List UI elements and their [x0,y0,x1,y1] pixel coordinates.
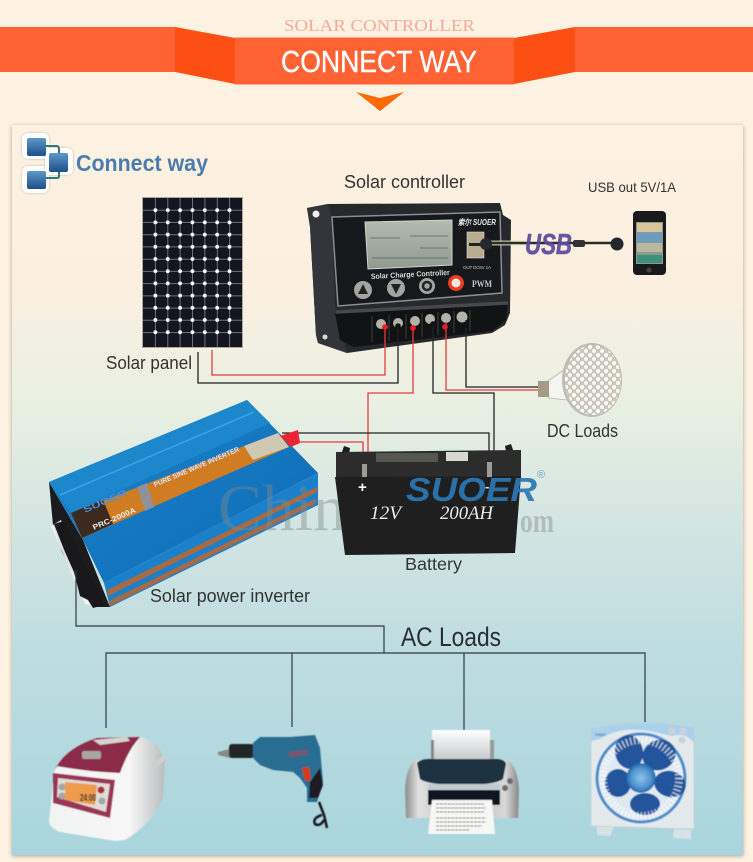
label: battery: Battery [405,554,462,574]
control buttons [354,275,464,299]
label: solar panel: Solar panel [106,353,192,373]
suoer logo: SUOER [406,471,537,508]
section header ribbon [0,27,753,84]
watermark [218,472,554,545]
inverter brand: SUOER [82,487,129,515]
label: ac loads: AC Loads [401,622,501,652]
wires: controller connections [198,320,538,468]
icon: box fan [591,723,694,839]
battery voltage: 12V [370,503,403,524]
device name: Solar Charge Controller [371,268,450,281]
icon: rice cooker [49,737,165,841]
fan brand: Haier [595,732,606,737]
watermark: om [520,503,554,540]
label: solar controller: Solar controller [344,172,465,192]
wires: inverter to battery [282,433,489,468]
icon: printer [405,730,519,834]
inverter model: PRC-2000A [91,505,138,532]
label: dc loads: DC Loads [547,421,618,441]
subtitle: SOLAR CONTROLLER [284,16,476,35]
inverter stripes [107,487,317,596]
solar charge controller [307,203,511,353]
inverter casing [49,400,318,583]
inverter red terminal [280,430,300,447]
battery minus sign: - [485,479,489,494]
inverter end plate [49,482,110,607]
heading: connect way: Connect way [76,150,208,176]
wires: ac distribution [76,570,645,730]
solar panel [142,197,243,348]
solar power inverter [49,400,318,608]
usb cable [480,238,624,250]
pwm mark: PWM [472,279,492,289]
down arrow [356,92,404,111]
inverter wave text: PURE SINE WAVE INVERTER [153,446,240,489]
cooker time: 24:00 [80,793,96,804]
battery [335,444,521,555]
lcd screen [365,220,452,269]
battery plus sign: + [358,479,367,496]
title: CONNECT WAY [281,44,477,79]
terminal contact dots [382,321,468,331]
inverter label band [71,433,289,538]
registered mark: ® [537,469,545,481]
label: solar power inverter: Solar power inverter [150,586,310,606]
icon: smartphone [633,211,666,275]
battery capacity: 200AH [440,503,494,524]
usb port [467,232,484,258]
label: usb out: USB out 5V/1A [588,179,677,195]
watermark: Chin [218,472,346,545]
output label: OUT DC5V 1A [463,265,491,270]
controller brand: 索尔 SUOER [458,218,496,227]
icon: led bulb [538,343,622,417]
icon: power drill [218,735,327,828]
usb label: USB [525,229,572,261]
drill brand: BOSCH [289,750,308,759]
icon: network blocks [22,133,73,193]
controller face [332,212,502,306]
terminal strip [335,303,508,347]
